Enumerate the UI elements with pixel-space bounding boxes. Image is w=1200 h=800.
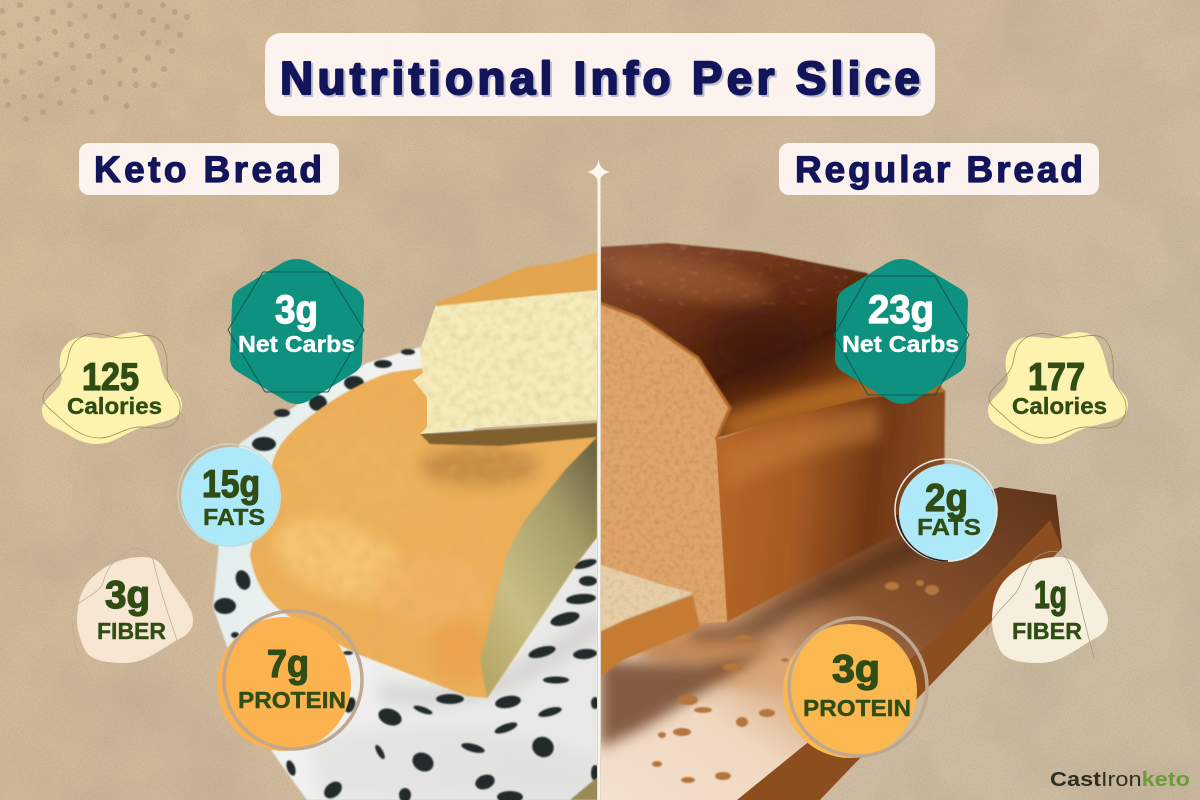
stat: keto fiber: FIBER — [97, 618, 166, 644]
stat: regular fiber: FIBER — [1012, 618, 1082, 644]
photo: regular bread — [600, 243, 1062, 800]
stat: regular fats: FATS — [917, 514, 981, 540]
stat: keto net carbs: Net Carbs — [238, 331, 355, 357]
stat: keto fats: 15g — [202, 463, 260, 506]
wooden board — [600, 487, 1062, 800]
stat: regular fats: 2g — [925, 477, 968, 520]
stat: regular protein: 3g — [832, 648, 880, 691]
stat: regular net carbs — [834, 259, 969, 404]
title — [265, 33, 935, 116]
centre divider with sparkle — [587, 160, 610, 800]
stat: regular protein — [783, 618, 927, 758]
stat: regular fats — [895, 459, 997, 562]
heading: keto bread: Keto Bread — [94, 149, 322, 190]
heading: keto bread — [79, 143, 339, 195]
stat: regular calories: Calories — [1012, 393, 1107, 419]
stat: keto fats — [178, 444, 281, 547]
small bread slice — [600, 560, 700, 677]
stat: keto calories: 125 — [82, 356, 139, 399]
keto loaf — [250, 368, 600, 700]
stat: keto protein: 7g — [267, 643, 309, 686]
decorative dot pattern — [0, 2, 190, 122]
title: Nutritional Info Per Slice — [282, 54, 922, 106]
stat: keto fats: FATS — [203, 504, 265, 530]
stat: regular calories: 177 — [1028, 356, 1085, 399]
stat: keto calories — [42, 332, 182, 444]
stat: keto protein: PROTEIN — [238, 687, 346, 713]
stat: keto net carbs: 3g — [275, 288, 318, 332]
stat: regular fiber — [986, 551, 1108, 663]
stat: keto net carbs — [228, 259, 364, 404]
photo: keto bread — [213, 252, 600, 800]
stat: regular calories — [988, 332, 1128, 444]
stat: keto calories: Calories — [67, 393, 162, 419]
stat: regular protein: PROTEIN — [803, 695, 911, 721]
regular loaf crust dome — [600, 243, 945, 438]
regular loaf sliced face — [600, 300, 735, 630]
title: Nutritional Info Per Slice — [280, 52, 920, 104]
stat: keto protein — [217, 611, 362, 751]
logo: CastIronketo: Cast Iron keto — [1050, 769, 1190, 791]
stat: regular net carbs: 23g — [868, 288, 934, 332]
stat: regular net carbs: Net Carbs — [842, 331, 959, 357]
regular loaf body — [715, 390, 945, 622]
stat: keto fiber: 3g — [105, 574, 150, 617]
keto cut slice — [410, 252, 600, 440]
stat: regular fiber: 1g — [1034, 574, 1067, 617]
polka dot napkin — [213, 347, 600, 800]
heading: regular bread: Regular Bread — [795, 149, 1083, 190]
stat: keto fiber — [72, 548, 193, 663]
